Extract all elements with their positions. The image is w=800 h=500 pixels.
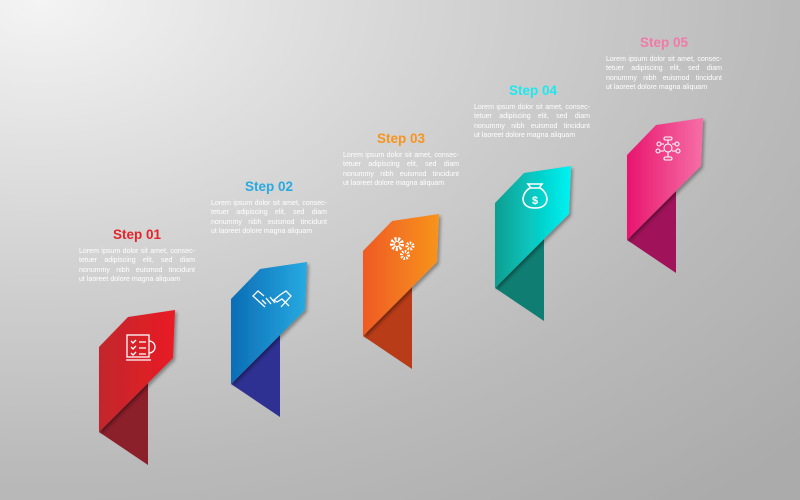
- step 04 text: nonummy nibh euismod tincidunt: [474, 123, 590, 130]
- step 1 shape: [99, 310, 175, 465]
- step 05 text: ut laoreet dolore magna aliquam: [606, 84, 707, 91]
- step 01 text: ut laoreet dolore magna aliquam: [79, 276, 180, 283]
- icon: handshake: [253, 291, 291, 307]
- step 01 title: Step 01: [113, 227, 161, 242]
- step 05 title: Step 05: [640, 35, 688, 50]
- step 01 text: tetuer adipiscing elit, sed diam: [79, 257, 195, 264]
- step 05 text: Lorem ipsum dolor sit amet, consec-: [606, 56, 722, 63]
- step 4 shape: [495, 166, 571, 321]
- step 04 text: [474, 104, 590, 139]
- step 02 title: Step 02: [245, 179, 293, 194]
- step 03 text: tetuer adipiscing elit, sed diam: [343, 161, 459, 168]
- step 03 title: Step 03: [377, 131, 425, 146]
- icon: money bag: $: [532, 195, 538, 207]
- step 03 text: nonummy nibh euismod tincidunt: [343, 171, 459, 178]
- icon: money bag: [523, 184, 547, 208]
- step 01 text: nonummy nibh euismod tincidunt: [79, 267, 195, 274]
- step 02 text: ut laoreet dolore magna aliquam: [211, 228, 312, 235]
- step 02 text: tetuer adipiscing elit, sed diam: [211, 209, 327, 216]
- step 04 text: tetuer adipiscing elit, sed diam: [474, 113, 590, 120]
- step 05 text: tetuer adipiscing elit, sed diam: [606, 65, 722, 72]
- icon: network: [656, 137, 680, 160]
- step 03 text: [343, 152, 459, 187]
- step 03 text: Lorem ipsum dolor sit amet, consec-: [343, 152, 459, 159]
- step 02 text: nonummy nibh euismod tincidunt: [211, 219, 327, 226]
- step 04 text: Lorem ipsum dolor sit amet, consec-: [474, 104, 590, 111]
- step 05 text: nonummy nibh euismod tincidunt: [606, 75, 722, 82]
- icon: checklist: [126, 335, 155, 360]
- step 3 shape: [363, 214, 439, 369]
- step 04 text: ut laoreet dolore magna aliquam: [474, 132, 575, 139]
- step 5 shape: [627, 118, 703, 273]
- step 03 text: ut laoreet dolore magna aliquam: [343, 180, 444, 187]
- step 01 text: [79, 248, 195, 283]
- step 02 text: [211, 200, 327, 235]
- step 2 shape: [231, 262, 307, 417]
- icon: gears: [392, 239, 413, 258]
- step 01 text: Lorem ipsum dolor sit amet, consec-: [79, 248, 195, 255]
- step 05 text: [606, 56, 722, 91]
- step 02 text: Lorem ipsum dolor sit amet, consec-: [211, 200, 327, 207]
- step 04 title: Step 04: [509, 83, 557, 98]
